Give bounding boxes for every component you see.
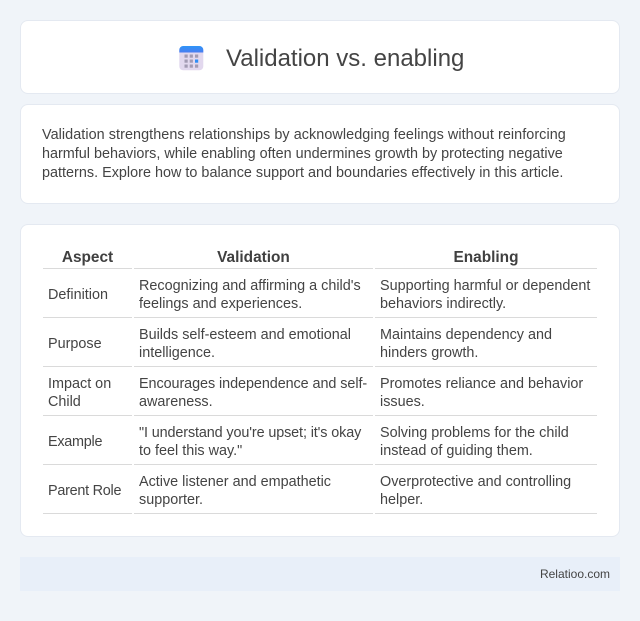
table rows: Purpose xyxy=(48,336,102,352)
table rows: feelings and experiences. xyxy=(139,296,302,312)
table rows: Solving problems for the child xyxy=(380,425,569,441)
table rows: Overprotective and controlling xyxy=(380,474,571,490)
table rows: Active listener and empathetic xyxy=(139,474,331,490)
intro text: Validation strengthens relationships by acknowledging feelings without reinforcing xyxy=(42,127,566,143)
title: Validation vs. enabling xyxy=(226,45,464,72)
icon: calendar xyxy=(179,46,204,70)
table rows: Promotes reliance and behavior xyxy=(380,376,583,392)
footer bar xyxy=(20,557,620,591)
panel: title card xyxy=(20,20,620,94)
table rows: behaviors indirectly. xyxy=(380,296,506,312)
footer brand: Relatioo.com xyxy=(540,567,610,581)
table rows: instead of guiding them. xyxy=(380,443,533,459)
table rows: Builds self-esteem and emotional xyxy=(139,327,351,343)
intro text xyxy=(42,127,566,181)
table: comparison xyxy=(43,249,597,514)
table rows: Maintains dependency and xyxy=(380,327,552,343)
table rows: Supporting harmful or dependent xyxy=(380,278,590,294)
panel: comparison table xyxy=(20,224,620,537)
table header: Validation xyxy=(217,249,290,266)
table rows: Example xyxy=(48,434,102,450)
table rows: hinders growth. xyxy=(380,345,478,361)
table header: Enabling xyxy=(454,249,518,266)
table header: Aspect xyxy=(62,249,113,266)
table header xyxy=(62,249,518,266)
table rows: "I understand you're upset; it's okay xyxy=(139,425,361,441)
table rows: Impact on xyxy=(48,376,111,392)
table rows: Child xyxy=(48,394,81,410)
table rows: helper. xyxy=(380,492,423,508)
table rows: to feel this way." xyxy=(139,443,242,459)
intro text: patterns. Explore how to balance support and boundaries effectively in this article. xyxy=(42,165,563,181)
table rows: issues. xyxy=(380,394,425,410)
panel: introduction xyxy=(20,104,620,204)
table rows: Recognizing and affirming a child's xyxy=(139,278,361,294)
table rows: Parent Role xyxy=(48,483,121,499)
table rows: supporter. xyxy=(139,492,203,508)
table rows: Definition xyxy=(48,287,108,303)
intro text: harmful behaviors, while enabling often undermines growth by protecting negative xyxy=(42,146,563,162)
table rows: intelligence. xyxy=(139,345,215,361)
table rows: awareness. xyxy=(139,394,213,410)
table rows: Encourages independence and self- xyxy=(139,376,367,392)
